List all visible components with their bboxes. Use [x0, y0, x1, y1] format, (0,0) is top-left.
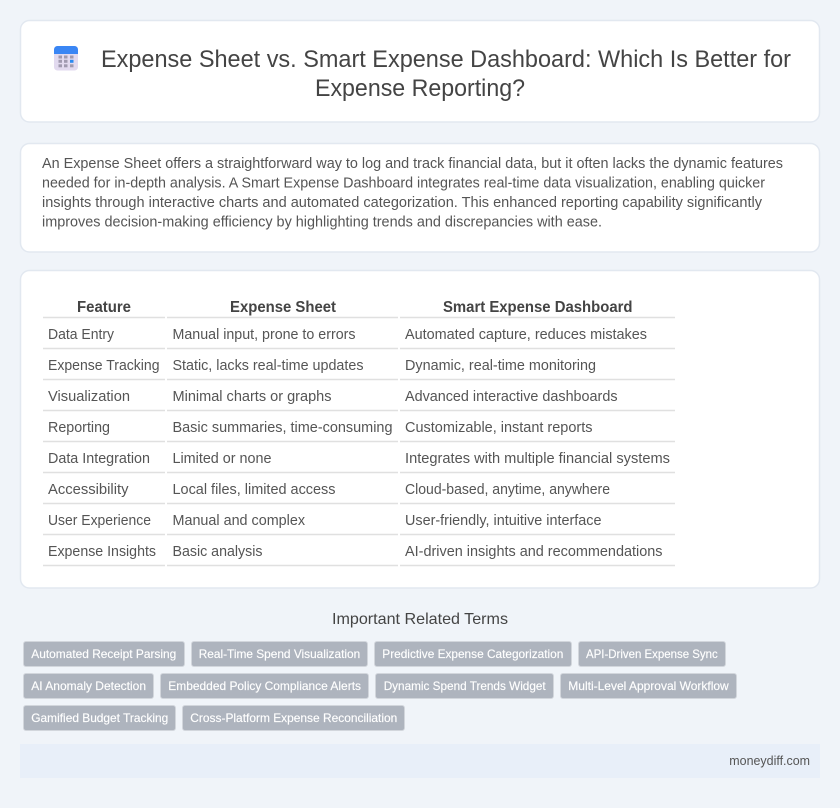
row: data integration: Data Integration [48, 451, 150, 467]
tag: Cross-Platform Expense Reconciliation [190, 711, 397, 725]
row: visualization: Minimal charts or graphs [172, 389, 332, 405]
row: user experience [48, 513, 602, 529]
title [101, 46, 791, 102]
row: data integration [48, 451, 670, 467]
tag [160, 674, 368, 698]
row: data entry: Manual input, prone to errors [172, 327, 356, 343]
row: reporting [48, 420, 592, 436]
row: visualization: Advanced interactive dashboards [405, 389, 618, 405]
row: expense tracking [48, 358, 596, 374]
row: user experience: User Experience [48, 513, 151, 529]
row: accessibility: Local files, limited access [172, 482, 336, 498]
title: Expense Sheet vs. Smart Expense Dashboard: Which Is Better for [101, 46, 791, 73]
tag [376, 674, 554, 698]
tag: Real-Time Spend Visualization [199, 647, 360, 661]
panel: title header [20, 20, 820, 122]
text block: summary: insights through interactive charts and automated categorization. This enhanced reporting capability significantly [42, 195, 763, 211]
table header: Expense Sheet [230, 299, 337, 316]
title: Expense Reporting? [315, 75, 525, 102]
text block: summary: An Expense Sheet offers a straightforward way to log and track financial data, but it often lacks the dynamic features [42, 156, 783, 172]
row: data integration: Limited or none [172, 451, 272, 467]
tag [24, 706, 176, 730]
tag [560, 674, 736, 698]
tag: AI Anomaly Detection [31, 679, 146, 693]
tag [578, 642, 726, 666]
row: reporting: Reporting [48, 420, 110, 436]
row: expense tracking: Static, lacks real-time updates [172, 358, 364, 374]
row: accessibility: Cloud-based, anytime, anywhere [405, 482, 610, 498]
tag list: related terms [24, 642, 736, 730]
footer: moneydiff.com [729, 753, 810, 768]
row: expense insights [48, 544, 662, 560]
tag [192, 642, 368, 666]
panel: summary paragraph [20, 144, 820, 252]
table header [77, 299, 632, 316]
tag: Embedded Policy Compliance Alerts [168, 679, 361, 693]
row: accessibility: Accessibility [48, 482, 129, 498]
row: expense tracking: Dynamic, real-time monitoring [405, 358, 596, 374]
table header: Smart Expense Dashboard [443, 299, 632, 316]
tag: API-Driven Expense Sync [586, 647, 718, 661]
row: data integration: Integrates with multiple financial systems [405, 451, 670, 467]
text block: summary [42, 156, 783, 230]
row: data entry: Data Entry [48, 327, 115, 343]
icon: calendar [54, 46, 78, 70]
tag [24, 642, 184, 666]
tag: Predictive Expense Categorization [382, 647, 563, 661]
row: data entry: Automated capture, reduces mistakes [405, 327, 647, 343]
tag [374, 642, 572, 666]
tag: Dynamic Spend Trends Widget [384, 679, 546, 693]
row: visualization [48, 389, 618, 405]
table header: Feature [77, 299, 131, 316]
tag: Gamified Budget Tracking [31, 711, 168, 725]
tag: Multi-Level Approval Workflow [568, 679, 729, 693]
row: user experience: Manual and complex [172, 513, 306, 529]
row: accessibility [48, 482, 610, 498]
text block: summary: needed for in-depth analysis. A Smart Expense Dashboard integrates real-time data visualization, enabling quicker [42, 176, 765, 192]
row: data entry [48, 327, 647, 343]
tag [182, 706, 404, 730]
row: visualization: Visualization [48, 389, 130, 405]
footer [20, 744, 820, 778]
tag [24, 674, 154, 698]
row: expense tracking: Expense Tracking [48, 358, 160, 374]
row: expense insights: Basic analysis [172, 544, 262, 560]
row: expense insights: Expense Insights [48, 544, 156, 560]
tag: Automated Receipt Parsing [31, 647, 176, 661]
text block: summary: improves decision-making efficiency by highlighting trends and discrepancies with ease. [42, 214, 602, 230]
row: reporting: Basic summaries, time-consuming [172, 420, 392, 436]
heading: important related terms: Important Related Terms [332, 611, 508, 628]
row: user experience: User-friendly, intuitive interface [405, 513, 602, 529]
row: expense insights: AI-driven insights and recommendations [405, 544, 662, 560]
row: reporting: Customizable, instant reports [405, 420, 592, 436]
panel: comparison table [20, 270, 820, 588]
